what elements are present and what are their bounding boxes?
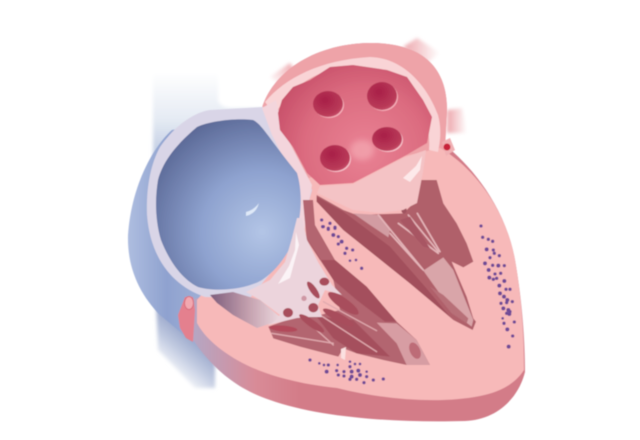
right pale zone (377, 323, 430, 365)
right ventricle cavity (268, 200, 430, 365)
pulmonary opening: lower left (320, 145, 351, 172)
dark trabeculae (317, 317, 390, 357)
pale atrial band (265, 57, 440, 152)
pale apex zone (423, 257, 473, 327)
left atrium outer wall (262, 43, 447, 190)
pale septum band (262, 100, 312, 240)
great vein, upper portion (153, 72, 262, 180)
right atrium chamber (156, 119, 301, 290)
chamber highlight (246, 203, 259, 216)
lavender right atrial wall (147, 107, 312, 298)
coronary vessel, left (178, 296, 195, 342)
conduction dots, apex and septum (308, 222, 385, 384)
right side outer blue surface (128, 120, 225, 345)
lower notch in muscle (341, 347, 346, 360)
tricuspid valve highlight (278, 232, 299, 284)
pale upper zone (353, 213, 390, 237)
great vein, lower portion (156, 300, 215, 388)
cavity base (268, 200, 430, 365)
knob (401, 206, 407, 214)
coronary vessel, right (442, 138, 455, 156)
heart body (128, 43, 525, 421)
dark upper band (308, 240, 397, 322)
cavity base (317, 180, 476, 330)
vessel stub: upper left (270, 63, 296, 83)
outer muscle rim (190, 43, 525, 421)
tendon lines (272, 302, 377, 352)
papillary muscles and openings (269, 278, 361, 335)
left atrium chamber (278, 65, 432, 185)
atrium soft highlight (350, 140, 374, 160)
left ventricle cavity (317, 180, 476, 330)
dark lower band (317, 197, 450, 317)
conduction dots, right wall (479, 224, 516, 349)
ventricle cut surface (197, 148, 524, 400)
pulmonary opening: upper left (313, 91, 344, 118)
pulmonary opening: lower right (372, 127, 403, 152)
pulmonary opening: upper right (367, 82, 398, 111)
apex shadow (430, 287, 468, 323)
mitral valve highlight (403, 156, 422, 182)
mitral valve leaflet (317, 150, 426, 213)
tendon lines (378, 213, 440, 270)
lower left wedge of right ventricle (210, 292, 280, 328)
thicker fingers (400, 217, 430, 248)
conduction dots, upper septum (320, 218, 337, 230)
apex blob (407, 341, 423, 361)
tricuspid valve (246, 218, 342, 325)
vessel stub: right (447, 108, 467, 133)
vessel stub: upper right (403, 38, 440, 63)
